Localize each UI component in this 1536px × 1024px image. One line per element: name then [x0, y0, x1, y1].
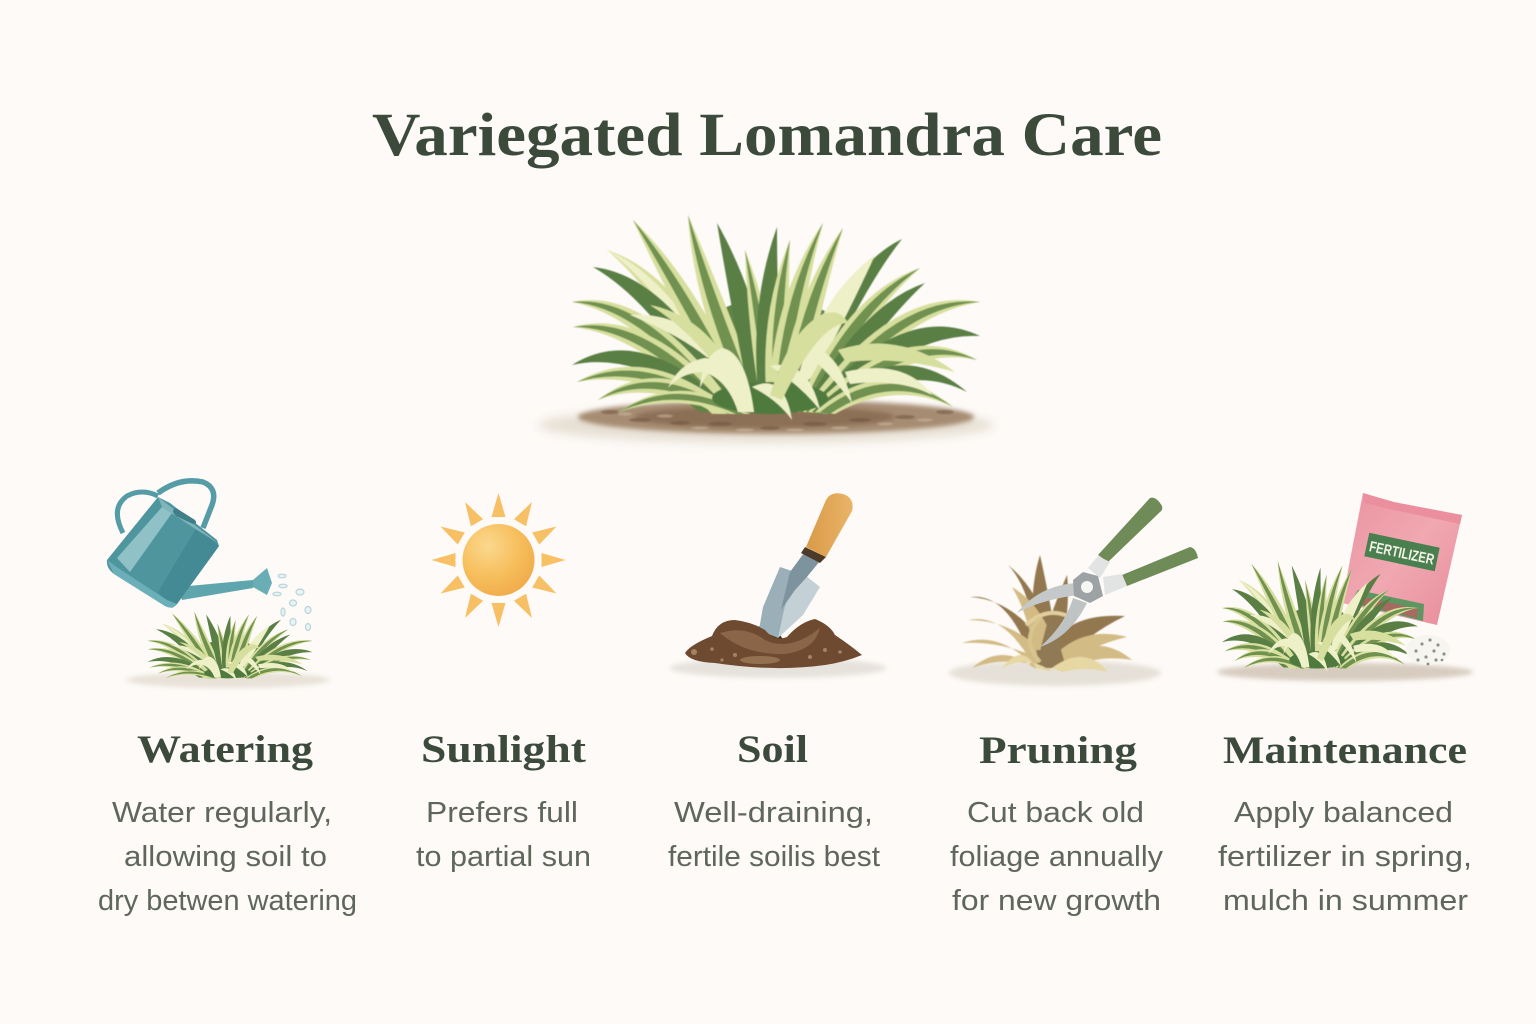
title: Variegated Lomandra Care [372, 102, 1162, 169]
body: pruning: Cut back old [967, 797, 1144, 829]
body: maintenance [1218, 797, 1472, 917]
body: watering: Water regularly, [112, 797, 332, 829]
icon: pruning shears [1017, 498, 1198, 647]
body: watering [98, 797, 357, 917]
icon: dried plant [949, 555, 1161, 686]
panel: pruning [949, 498, 1198, 917]
body: maintenance: Apply balanced [1234, 797, 1453, 829]
icon: sun [432, 493, 566, 627]
icon: trowel in soil [670, 493, 886, 678]
soil bed [538, 400, 994, 443]
panel: sunlight [416, 493, 591, 873]
panel: maintenance [1217, 493, 1473, 917]
heading: soil: Soil [737, 728, 808, 771]
body: sunlight: Prefers full [426, 797, 578, 829]
illustration: central lomandra plant [538, 215, 994, 443]
body: pruning [950, 797, 1164, 917]
panel: watering [98, 481, 357, 917]
label: fertilizer: FERTILIZER [1368, 538, 1436, 569]
icon: fertilizer granules [1406, 635, 1450, 666]
body: maintenance: fertilizer in spring, [1218, 841, 1472, 873]
body: watering: allowing soil to [124, 841, 327, 873]
plant foliage [572, 215, 980, 420]
icon: water droplets [273, 574, 311, 630]
icon: watering can and plant [107, 481, 330, 688]
body: sunlight [416, 797, 591, 873]
body: watering: dry betwen watering [98, 885, 357, 917]
body: pruning: foliage annually [950, 841, 1164, 873]
body: soil: Well-draining, [674, 797, 873, 829]
heading: pruning: Pruning [979, 729, 1138, 772]
body: sunlight: to partial sun [416, 841, 591, 873]
body: soil: fertile soilis best [668, 841, 880, 873]
icon: fertilizer bag and plant [1217, 493, 1473, 681]
body: maintenance: mulch in summer [1223, 885, 1468, 917]
body: pruning: for new growth [952, 885, 1161, 917]
heading: watering: Watering [137, 728, 314, 771]
body: soil [668, 797, 880, 873]
panel: soil [668, 493, 886, 873]
heading: sunlight: Sunlight [421, 728, 586, 771]
heading: maintenance: Maintenance [1223, 729, 1467, 772]
